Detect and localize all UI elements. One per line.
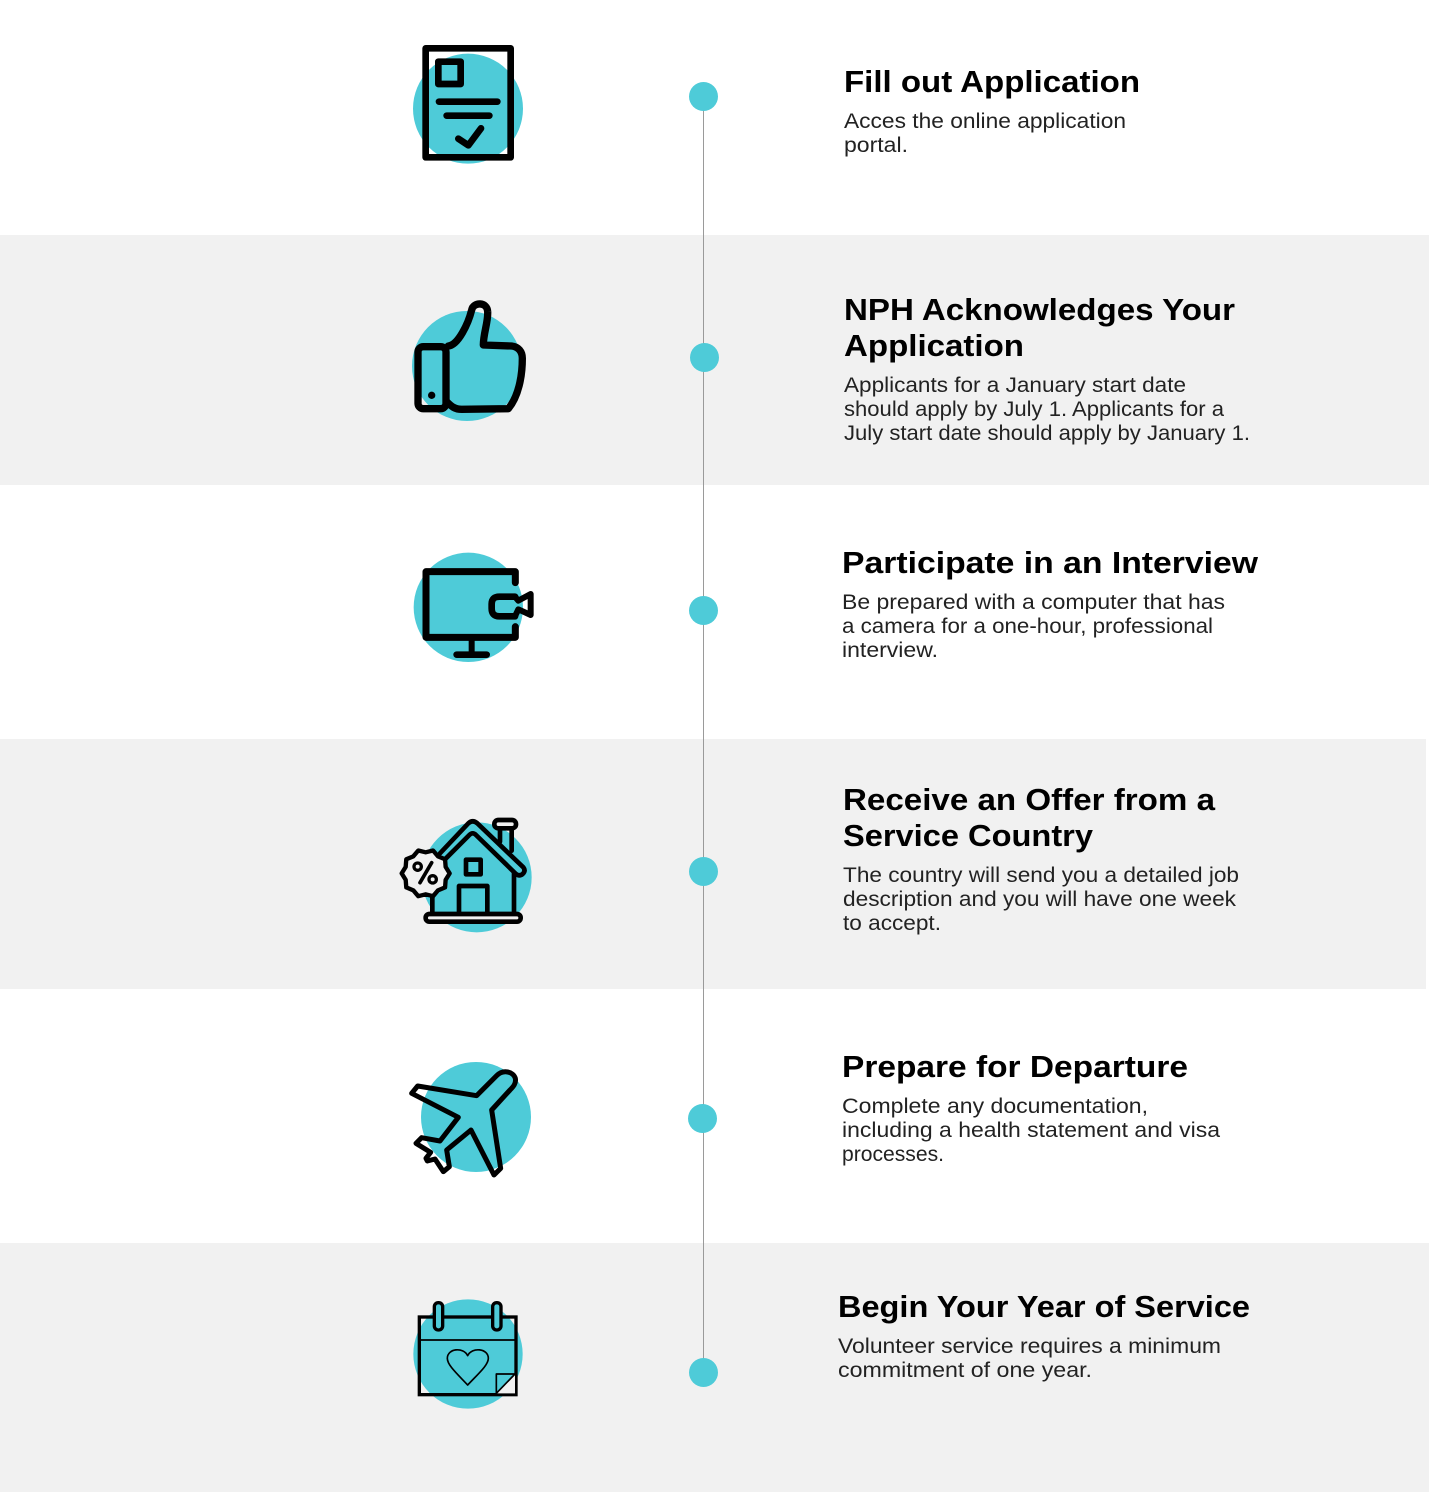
- step 5 text: Prepare for Departure: [842, 1049, 1220, 1166]
- step 2 text: NPH Acknowledges Your Application: should apply by July 1. Applicants for a: [844, 398, 1224, 421]
- step 3 text: Participate in an Interview: Participate in an Interview: [842, 545, 1259, 580]
- icon: airplane: [412, 1062, 531, 1175]
- step 6 text: Begin Your Year of Service: Volunteer service requires a minimum: [838, 1335, 1221, 1358]
- step 4 text: Receive an Offer from a Service Country: description and you will have one week: [843, 888, 1237, 911]
- step 3 text: Participate in an Interview: [842, 545, 1259, 662]
- step 4 text: Receive an Offer from a Service Country: Service Country: [843, 818, 1094, 853]
- timeline: vertical line with step dots: [688, 82, 719, 1387]
- icon: calendar with heart: [413, 1299, 523, 1409]
- step 2 text: NPH Acknowledges Your Application: NPH Acknowledges Your: [844, 292, 1235, 327]
- icon: house with percent badge: [402, 820, 532, 932]
- step 1 text: Fill out Application: Fill out Application: [844, 64, 1140, 99]
- step 1 text: Fill out Application: portal.: [844, 134, 908, 157]
- step 4 text: Receive an Offer from a Service Country: Receive an Offer from a: [843, 782, 1216, 817]
- step 5 text: Prepare for Departure: including a health statement and visa: [842, 1119, 1220, 1142]
- step 6 text: Begin Your Year of Service: [838, 1289, 1250, 1382]
- step 2 text: NPH Acknowledges Your Application: Application: [844, 328, 1024, 363]
- step 2 text: NPH Acknowledges Your Application: [844, 292, 1250, 445]
- step 5 text: Prepare for Departure: processes.: [842, 1143, 944, 1166]
- step 5 text: Prepare for Departure: Prepare for Departure: [842, 1049, 1188, 1084]
- step 3 text: Participate in an Interview: Be prepared with a computer that has: [842, 591, 1225, 614]
- step 3 text: Participate in an Interview: interview.: [842, 639, 938, 662]
- step 1 text: Fill out Application: Acces the online application: [844, 110, 1126, 133]
- step 6 text: Begin Your Year of Service: Begin Your Year of Service: [838, 1289, 1250, 1324]
- step 5 text: Prepare for Departure: Complete any documentation,: [842, 1095, 1148, 1118]
- step 6 text: Begin Your Year of Service: commitment of one year.: [838, 1359, 1092, 1382]
- step 2 text: NPH Acknowledges Your Application: Applicants for a January start date: [844, 374, 1186, 397]
- step 4 text: Receive an Offer from a Service Country: The country will send you a detailed job: [843, 864, 1239, 887]
- step 4 text: Receive an Offer from a Service Country: [843, 782, 1239, 935]
- step 4 text: Receive an Offer from a Service Country: to accept.: [843, 912, 941, 935]
- step 1 text: Fill out Application: [844, 64, 1140, 157]
- step 2 text: NPH Acknowledges Your Application: July start date should apply by January 1.: [844, 422, 1250, 445]
- icon: thumbs up: [412, 304, 522, 421]
- step 3 text: Participate in an Interview: a camera for a one-hour, professional: [842, 615, 1213, 638]
- icon: application document: [413, 48, 523, 164]
- icon: computer monitor with camera: [414, 553, 531, 662]
